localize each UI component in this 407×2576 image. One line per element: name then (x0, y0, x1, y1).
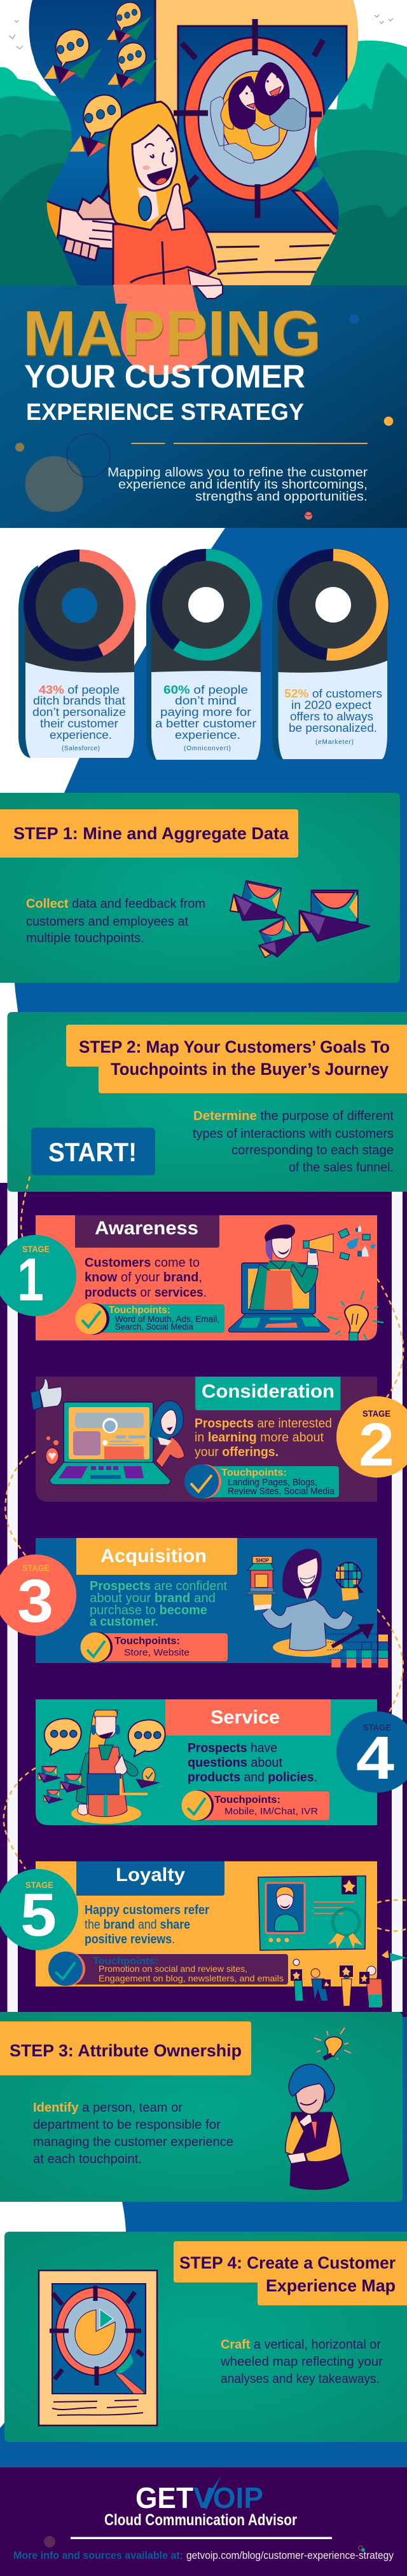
stat text 3 (284, 687, 382, 746)
stat text 2: paying more for (160, 706, 251, 718)
step 2 text: types of interactions with customers (193, 1126, 394, 1141)
stage 2 text (195, 1417, 332, 1459)
stat text 1: experience. (50, 729, 112, 741)
stat text 2: don’t mind (175, 694, 237, 707)
step 2 text: of the sales funnel. (289, 1160, 394, 1175)
stage 1 badge: 1 (17, 1246, 44, 1314)
globe (336, 1563, 364, 1601)
shop (247, 1556, 276, 1610)
stage 1 touchpoints: Touchpoints: (109, 1305, 170, 1316)
stage 3 text: Prospects are confident (90, 1579, 227, 1593)
stat card 3 (272, 555, 387, 759)
stat text 1: 43% of people (39, 684, 120, 696)
step 1 text (26, 896, 205, 945)
stage 1 touchpoints: Word of Mouth, Ads, Email, (115, 1314, 219, 1324)
stage 3 touchpoints: Touchpoints: (114, 1636, 180, 1647)
stage 4 touchpoints: Mobile, IM/Chat, IVR (224, 1806, 318, 1817)
stage 3 touchpoints: Store, Website (124, 1647, 190, 1658)
illustration: support agent (38, 1710, 165, 1824)
step 4 heading: STEP 4: Create a Customer (179, 2253, 396, 2272)
step 2 text: corresponding to each stage (231, 1143, 394, 1157)
step 3 text: at each touchpoint. (33, 2152, 142, 2166)
stage 1 badge: STAGE (22, 1244, 50, 1254)
stage 3 title tab (76, 1538, 237, 1575)
stage 3 badge (0, 1554, 76, 1636)
footer (0, 2467, 407, 2576)
panel: stage 2 consideration (31, 1377, 377, 1502)
stage 2 badge: 2 (359, 1411, 394, 1479)
panel: step 4 (4, 2232, 407, 2442)
illustration: woman with shop and globe (247, 1549, 388, 1668)
poster (155, 0, 371, 289)
hearts (46, 1436, 59, 1464)
stage 3 text: a customer. (90, 1615, 158, 1629)
stat text 2 (155, 684, 256, 752)
stage 4 title tab: Service (210, 1707, 280, 1728)
stage 3 text: about your brand and (90, 1591, 216, 1605)
blue background band (0, 528, 407, 1016)
intro text: experience and identify its shortcomings, (118, 478, 368, 492)
step 3 heading (0, 2021, 251, 2075)
stage 2 touchpoints: Review Sites, Social Media (228, 1487, 335, 1497)
step 2 text (193, 1109, 394, 1175)
stage 5 text (85, 1903, 209, 1946)
stage 4 text: questions about (188, 1756, 282, 1770)
hero panel (0, 285, 407, 528)
start badge (31, 1128, 155, 1175)
stage 1 badge (0, 1235, 76, 1316)
step 2 heading (66, 1025, 407, 1093)
panel: step 1 (0, 793, 400, 983)
stat text 2: experience. (175, 729, 240, 741)
stage 2 badge: STAGE (362, 1408, 390, 1419)
stat text 2: 60% of people (163, 684, 248, 696)
stage 5 touchpoints (48, 1952, 288, 1986)
panel: step 2 (8, 1012, 407, 1192)
intro text: Mapping allows you to refine the customer (107, 466, 368, 480)
stat text 3: offers to always (290, 710, 373, 723)
step 3 text (33, 2100, 233, 2166)
woman (150, 1401, 184, 1467)
stage 5 touchpoints: Promotion on social and review sites, (99, 1964, 247, 1974)
stage 4 text: Prospects have (188, 1741, 277, 1755)
illustration: woman and laptop (31, 1379, 184, 1485)
bulb small (314, 2028, 351, 2061)
logo (135, 2476, 263, 2514)
panel: stage 5 loyalty (36, 1861, 383, 2007)
donut 1 (29, 555, 130, 656)
stage 2 touchpoints: Touchpoints: (221, 1467, 287, 1478)
stat text 1: their customer (40, 717, 118, 730)
stat card 2 (146, 555, 261, 760)
stage 4 badge: STAGE (363, 1722, 391, 1732)
intro text: strengths and opportunities. (195, 490, 368, 504)
customers inside lens (210, 62, 307, 163)
stage 4 text: products and policies. (188, 1770, 317, 1784)
title: YOUR CUSTOMER (24, 358, 305, 394)
stage 1 touchpoints (75, 1303, 224, 1335)
step 4 text (220, 2337, 383, 2386)
stage 4 text (188, 1741, 317, 1784)
purple stages background (0, 1183, 407, 2017)
tagline: Cloud Communication Advisor (104, 2511, 297, 2529)
stage 5 badge: STAGE (25, 1880, 53, 1890)
step 1 heading (0, 809, 298, 858)
intro text (107, 466, 368, 504)
stage 4 badge (336, 1711, 407, 1793)
start badge: START! (48, 1137, 137, 1167)
illustration: thinking man with bulb (286, 2028, 351, 2190)
title (23, 298, 322, 425)
decorative circles (25, 456, 83, 512)
title: EXPERIENCE STRATEGY (26, 399, 304, 425)
stage 5 text: the brand and share (85, 1918, 190, 1932)
sources (13, 2549, 394, 2561)
navy blob with poster (19, 0, 375, 289)
magnifier (174, 19, 340, 234)
stage 5 title tab: Loyalty (116, 1865, 185, 1885)
panel: stage 1 awareness (36, 1215, 383, 1341)
decorative divider (72, 778, 370, 779)
stage 1 text (85, 1256, 207, 1300)
panel: stage 4 service (36, 1699, 377, 1825)
stage 1 text: products or services. (85, 1286, 207, 1300)
stage 5 text: Happy customers refer (85, 1903, 209, 1917)
stage 3 badge: 3 (17, 1567, 53, 1635)
bubble planes (44, 3, 158, 158)
step 2 heading: Touchpoints in the Buyer’s Journey (111, 1060, 389, 1079)
icon: envelopes (229, 879, 370, 962)
dotted journey path (4, 1177, 407, 1931)
stage 1 touchpoints: Search, Social Media (115, 1321, 193, 1332)
shop: SHOP (256, 1558, 270, 1563)
illustration: review people (291, 1959, 383, 2007)
logo: GET (135, 2481, 193, 2514)
stage 1 title tab (75, 1215, 219, 1248)
stage 5 badge: 5 (20, 1881, 57, 1949)
step 3 text: Identify a person, team or (33, 2100, 183, 2115)
handshake (45, 178, 116, 260)
step 3 heading: STEP 3: Attribute Ownership (10, 2041, 242, 2060)
woman character (108, 102, 223, 286)
stage 3 touchpoints (80, 1632, 228, 1662)
birds (9, 15, 393, 49)
logo: VOIP (193, 2481, 263, 2514)
stat text 3: be personalized. (289, 722, 377, 734)
step 3 text: department to be responsible for (33, 2117, 221, 2132)
stage 5 badge (0, 1869, 78, 1950)
step 3 text: managing the customer experience (33, 2134, 233, 2149)
sources: More info and sources available at: (13, 2549, 183, 2561)
stat text 2: (Omniconvert) (184, 745, 231, 752)
stat text 1 (32, 684, 126, 752)
stage 3 title tab: Acquisition (100, 1546, 207, 1567)
stat text 2: a better customer (155, 717, 256, 730)
step 2 text: Determine the purpose of different (193, 1109, 394, 1123)
stat text 3: in 2020 expect (291, 699, 371, 711)
stage 2 title tab (195, 1377, 341, 1410)
stage 1 text: know of your brand, (85, 1271, 202, 1285)
stage 2 badge (336, 1396, 407, 1479)
illustration: map poster (39, 2270, 157, 2425)
step 4 heading: Experience Map (266, 2276, 396, 2295)
panel: step 3 (0, 2012, 403, 2202)
stat text 1: (Salesforce) (62, 745, 100, 752)
stage 4 badge: 4 (356, 1724, 394, 1792)
stage 2 text: in learning more about (195, 1431, 324, 1445)
stage 3 text: purchase to become (90, 1603, 207, 1617)
green hills left (0, 67, 95, 285)
hero illustration (0, 0, 407, 289)
step 4 text: analyses and key takeaways. (221, 2371, 380, 2386)
title: MAPPING (24, 299, 322, 370)
step 2 heading: STEP 2: Map Your Customers’ Goals To (79, 1037, 390, 1056)
stage 4 title tab (165, 1699, 331, 1736)
green hills right (305, 41, 407, 285)
stage 3 text (90, 1579, 227, 1629)
stat text 1: ditch brands that (33, 694, 125, 707)
step 1 text: multiple touchpoints. (26, 931, 144, 945)
chart (328, 1624, 388, 1668)
intro divider (131, 443, 368, 444)
illustration: man with megaphone on laptop (228, 1224, 383, 1341)
stage 5 touchpoints: Engagement on blog, newsletters, and emails (99, 1973, 284, 1983)
stage 5 touchpoints: Touchpoints: (93, 1956, 158, 1967)
step 4 text: Craft a vertical, horizontal or (221, 2337, 381, 2352)
thumbs up (31, 1379, 62, 1410)
stage 2 text: Prospects are interested (195, 1417, 332, 1431)
step 1 heading: STEP 1: Mine and Aggregate Data (13, 824, 289, 843)
cuff (188, 270, 223, 287)
step 1 text: Collect data and feedback from (26, 896, 205, 911)
title: MAPPING (23, 298, 321, 369)
stage 5 text: positive reviews. (85, 1932, 175, 1946)
step 4 text: wheeled map reflecting your (220, 2354, 383, 2369)
stage 1 title tab: Awareness (95, 1218, 198, 1239)
step 4 heading (174, 2241, 407, 2305)
donut 2 (156, 555, 256, 654)
stage 2 touchpoints: Landing Pages, Blogs, (228, 1478, 317, 1488)
blue band lower (0, 2017, 407, 2467)
stage 2 title tab: Consideration (202, 1381, 335, 1402)
paper plane right (380, 1950, 407, 1963)
stage 5 title tab (76, 1861, 224, 1896)
donut 3 (284, 555, 383, 654)
stage 4 touchpoints (182, 1790, 329, 1821)
stage 2 touchpoints (184, 1464, 339, 1499)
stat text 3: (eMarketer) (315, 739, 354, 746)
sweater continuation (113, 285, 207, 375)
panel: stage 3 acquisition (36, 1538, 388, 1668)
stat card 1 (18, 555, 134, 758)
stage 4 touchpoints: Touchpoints: (214, 1795, 280, 1805)
social icons (338, 1225, 376, 1260)
stat text 3: 52% of customers (284, 687, 382, 700)
stage 1 text: Customers come to (85, 1256, 200, 1270)
illustration: certificate (258, 1876, 366, 1950)
stage 2 text: your offerings. (195, 1445, 279, 1459)
stat text 1: don’t personalize (32, 706, 126, 718)
stage 3 badge: STAGE (22, 1563, 50, 1573)
step 1 text: customers and employees at (26, 914, 188, 929)
bulb (328, 1291, 383, 1341)
